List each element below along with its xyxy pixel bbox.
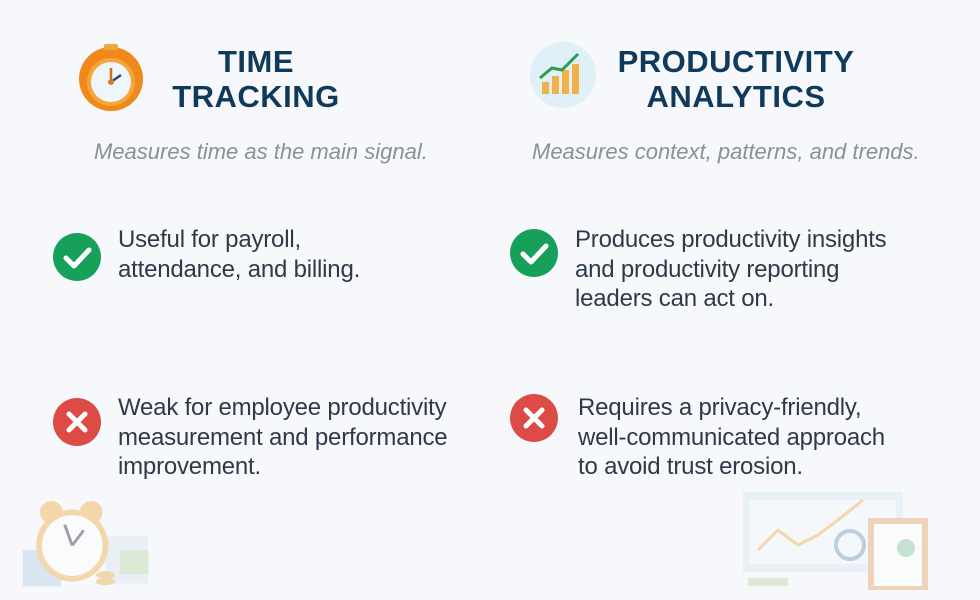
title: productivity analytics: ANALYTICS (646, 79, 826, 114)
text: con right: well-communicated approach (578, 424, 885, 450)
icon: check left (53, 233, 101, 281)
text: pro right: leaders can act on. (575, 285, 774, 312)
text: pro right: Produces productivity insights (575, 226, 886, 253)
title: productivity analytics: PRODUCTIVITY (618, 44, 854, 79)
text: con right: Requires a privacy-friendly, (578, 394, 861, 421)
subtitle left: Measures time as the main signal. (94, 139, 428, 164)
title: time tracking (172, 44, 340, 114)
text: pro right (575, 226, 886, 312)
text: con right (578, 394, 885, 480)
text: con right: to avoid trust erosion. (578, 453, 803, 480)
text: con left: improvement. (118, 453, 261, 480)
title: time tracking: TRACKING (172, 79, 340, 114)
subtitle right: Measures context, patterns, and trends. (532, 139, 920, 164)
text: pro left: Useful for payroll, (118, 226, 301, 253)
text: pro left (118, 226, 360, 282)
text: con left: measurement and performance (118, 424, 447, 450)
icon: analytics (530, 42, 596, 108)
icon: stopwatch (79, 44, 143, 111)
illustration: analytics desk (743, 492, 928, 590)
text: pro left: attendance, and billing. (118, 256, 360, 282)
icon: cross left (53, 398, 101, 446)
text: con left (118, 394, 447, 480)
text: pro right: and productivity reporting (575, 256, 839, 282)
title: time tracking: TIME (218, 44, 294, 79)
icon: cross right (510, 394, 558, 442)
title: productivity analytics (618, 44, 854, 114)
illustration: alarm clock (22, 500, 148, 586)
text: con left: Weak for employee productivity (118, 394, 446, 421)
icon: check right (510, 229, 558, 277)
